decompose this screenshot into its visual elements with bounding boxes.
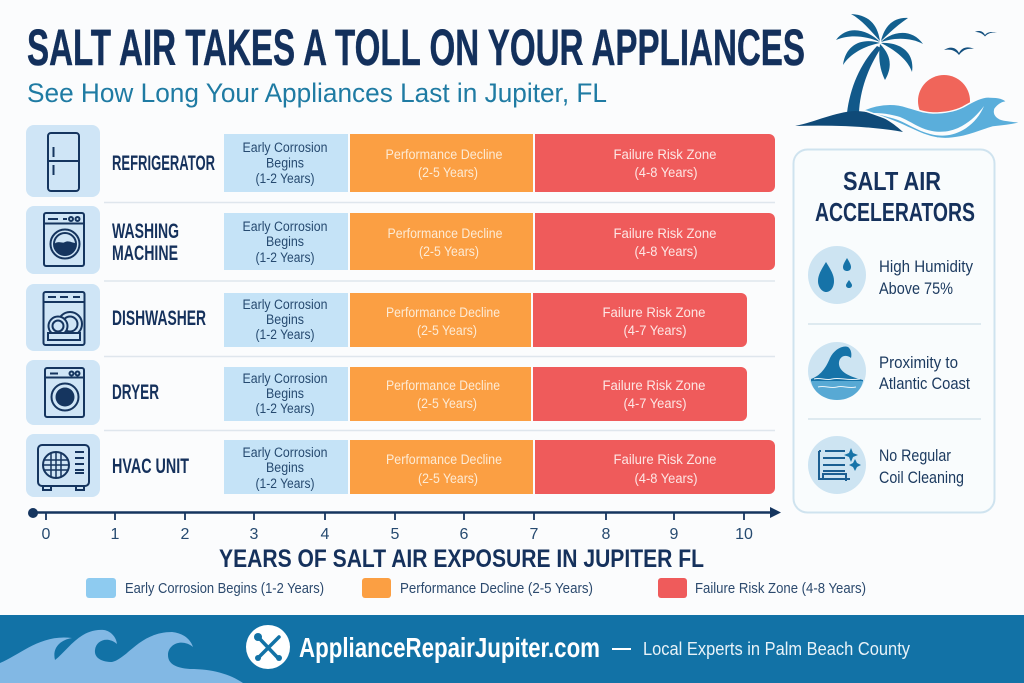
icon: water drops	[808, 246, 866, 304]
bar: performance decline: (2-5 Years)	[418, 471, 478, 486]
axis: years: 0	[42, 526, 51, 543]
text: coil cleaning: Coil Cleaning	[879, 469, 964, 487]
label: washing machine: WASHING	[112, 220, 179, 243]
axis: years: 8	[602, 526, 611, 543]
bar: early corrosion: (1-2 Years)	[256, 476, 314, 491]
bar: early corrosion: Begins	[266, 460, 304, 475]
icon: wave	[808, 342, 866, 400]
label: refrigerator: REFRIGERATOR	[112, 152, 215, 175]
axis: years: 10	[735, 526, 753, 543]
row: dryer	[26, 360, 747, 425]
row: washing machine	[26, 206, 775, 274]
bar: performance decline: Performance Decline	[388, 226, 502, 241]
icon: dryer	[26, 360, 100, 425]
bar: performance decline: Performance Decline	[386, 147, 502, 162]
bar: early corrosion: Early Corrosion	[242, 371, 328, 386]
bar: performance decline	[350, 213, 533, 270]
panel heading: ACCELERATORS	[815, 197, 975, 227]
bar: performance decline: Performance Decline	[386, 305, 500, 320]
bar: failure risk zone: Failure Risk Zone	[602, 305, 706, 320]
icon: refrigerator	[26, 125, 100, 197]
bar: failure risk zone	[535, 134, 775, 192]
bar: failure risk zone: (4-7 Years)	[624, 396, 686, 411]
bar: early corrosion: (1-2 Years)	[256, 327, 314, 342]
bar: early corrosion	[224, 293, 348, 347]
illustration: palm tree, sun and wave	[795, 14, 1024, 139]
icon: clean coil	[808, 436, 866, 494]
axis: years: 7	[530, 526, 539, 543]
bar: early corrosion: Early Corrosion	[242, 297, 328, 312]
footer website: ApplianceRepairJupiter.com	[299, 632, 600, 663]
bar: early corrosion	[224, 367, 348, 421]
bar: failure risk zone: (4-8 Years)	[634, 244, 698, 259]
bar: early corrosion: (1-2 Years)	[256, 171, 314, 186]
text: proximity: Atlantic Coast	[879, 375, 970, 393]
bar: performance decline: (2-5 Years)	[417, 323, 477, 338]
icon: hvac unit	[26, 434, 100, 497]
bar: early corrosion: (1-2 Years)	[256, 401, 314, 416]
legend: Early Corrosion Begins (1-2 Years)	[125, 581, 324, 597]
bar: early corrosion: Begins	[266, 312, 304, 327]
bar: early corrosion	[224, 134, 348, 192]
bar: early corrosion	[224, 440, 348, 494]
label: dryer: DRYER	[112, 381, 159, 404]
footer waves	[0, 630, 243, 683]
bar: failure risk zone: Failure Risk Zone	[602, 378, 706, 393]
legend: Performance Decline (2-5 Years)	[400, 581, 593, 597]
bar: failure risk zone: Failure Risk Zone	[614, 452, 716, 467]
bar: early corrosion: Early Corrosion	[242, 140, 328, 155]
row: dishwasher	[26, 284, 747, 351]
icon: washing machine	[26, 206, 100, 274]
panel: salt air accelerators	[794, 150, 994, 512]
bar: failure risk zone: Failure Risk Zone	[614, 226, 716, 241]
text: high humidity: Above 75%	[879, 280, 953, 298]
axis: years: 1	[111, 526, 120, 543]
icon: tools	[246, 625, 290, 669]
axis: years: 6	[460, 526, 469, 543]
bar: performance decline: Performance Decline	[386, 452, 502, 467]
bar: early corrosion: Early Corrosion	[242, 219, 328, 234]
text: proximity: Proximity to	[879, 354, 958, 372]
footer band	[0, 615, 1024, 683]
bar: early corrosion	[224, 213, 348, 270]
bar: early corrosion: Early Corrosion	[242, 445, 328, 460]
bar: failure risk zone: Failure Risk Zone	[614, 147, 716, 162]
axis title: YEARS OF SALT AIR EXPOSURE IN JUPITER FL	[219, 545, 704, 573]
bar: performance decline: (2-5 Years)	[419, 244, 479, 259]
axis: years: 4	[321, 526, 330, 543]
bar: failure risk zone	[535, 213, 775, 270]
bar: failure risk zone: (4-8 Years)	[634, 165, 698, 180]
axis: years: 3	[250, 526, 259, 543]
bar: early corrosion: Begins	[266, 234, 304, 249]
text: high humidity: High Humidity	[879, 258, 974, 276]
bar: failure risk zone	[535, 440, 775, 494]
bar: performance decline	[350, 367, 531, 421]
bar: performance decline	[350, 440, 533, 494]
label: hvac unit: HVAC UNIT	[112, 455, 189, 478]
bar: early corrosion: Begins	[266, 386, 304, 401]
legend	[86, 578, 866, 598]
footer tagline: Local Experts in Palm Beach County	[643, 639, 910, 659]
axis: years: 2	[181, 526, 190, 543]
panel heading: SALT AIR	[843, 166, 941, 196]
bar: failure risk zone	[533, 367, 747, 421]
bar: performance decline: (2-5 Years)	[418, 165, 478, 180]
axis: years: 9	[670, 526, 679, 543]
row: refrigerator	[26, 125, 775, 197]
label: dishwasher: DISHWASHER	[112, 307, 206, 330]
bar: performance decline	[350, 293, 531, 347]
label: washing machine: MACHINE	[112, 242, 178, 265]
bar: early corrosion: (1-2 Years)	[256, 250, 314, 265]
bar: performance decline	[350, 134, 533, 192]
bar: failure risk zone: (4-7 Years)	[624, 323, 686, 338]
bar: early corrosion: Begins	[266, 156, 304, 170]
row: hvac unit	[26, 434, 775, 497]
icon: dishwasher	[26, 284, 100, 351]
bar: failure risk zone: (4-8 Years)	[634, 471, 698, 486]
bar: performance decline: Performance Decline	[386, 378, 500, 393]
bar: failure risk zone	[533, 293, 747, 347]
legend: Failure Risk Zone (4-8 Years)	[695, 581, 866, 597]
axis: years: 5	[391, 526, 400, 543]
axis: years	[28, 507, 781, 543]
bar: performance decline: (2-5 Years)	[417, 396, 477, 411]
subtitle: See How Long Your Appliances Last in Jupiter, FL	[27, 78, 607, 108]
text: coil cleaning: No Regular	[879, 447, 951, 465]
